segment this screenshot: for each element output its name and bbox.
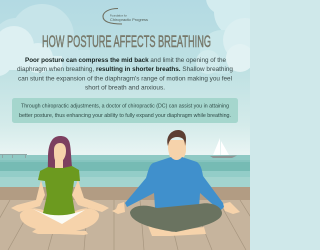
callout text: better posture, thus enhancing your ability to fully expand your diaphragm while breathing. [19,113,231,119]
intro paragraph: can stunt the expansion of the diaphragm's range of motion making you feel [18,76,232,82]
legs [20,208,99,235]
green top [38,166,80,215]
cloud: front left [0,26,62,76]
feet [148,226,206,236]
cloud: back left [0,4,90,68]
logo [103,8,148,24]
trousers [130,203,222,232]
icon: sailboat [210,138,237,158]
cloud: mid right [196,18,267,74]
intro paragraph: Poor posture can compress the mid back and limit the opening of the [25,57,227,64]
sky background [0,0,250,156]
callout text: Through chiropractic adjustments, a doctor of chiropractic (DC) can assist you in attaining [21,104,229,110]
man figure [112,130,240,236]
intro paragraph: short of breath and anxious. [85,84,165,92]
left hand [112,202,125,214]
deck rail [0,187,250,200]
deck planks [0,200,262,250]
logo text: Chiropractic Progress [110,17,148,22]
logo text [110,14,148,22]
intro paragraph: diaphragm when breathing, resulting in shorter breaths. Shallow breathing [17,66,234,73]
right hand [222,202,240,214]
callout panel [12,98,238,123]
hair [48,136,72,176]
neck and face [54,143,66,168]
callout text [19,104,231,119]
clouds [0,0,267,76]
hair [167,130,186,146]
shorts [33,209,85,224]
woman figure [11,136,109,235]
logo text: Foundation for [110,14,127,18]
head and neck [168,140,186,167]
icon: pier [0,154,27,158]
intro paragraph [17,57,234,92]
sea [0,155,250,188]
arms [11,180,109,212]
cloud: top right [206,0,266,38]
icon: logo arc [103,8,122,24]
blue sweater [125,157,224,211]
